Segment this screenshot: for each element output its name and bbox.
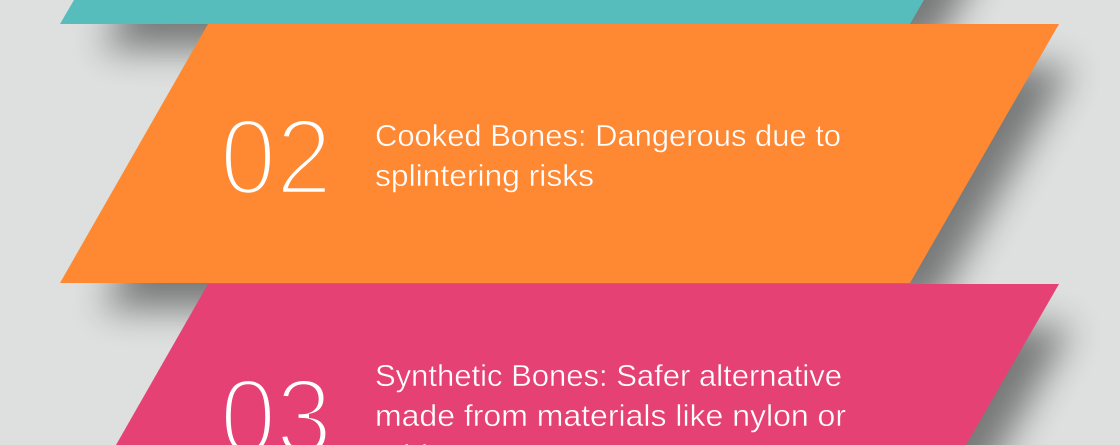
text: synthetic bones xyxy=(375,358,846,445)
panel: pink band 03 xyxy=(101,284,1072,445)
panel: teal band 01 xyxy=(60,0,1072,49)
panel: orange band 02 xyxy=(60,24,1072,309)
text: cooked bones xyxy=(375,118,841,193)
text: synthetic bones: made from materials like nylon or xyxy=(375,398,846,433)
text: synthetic bones: Synthetic Bones: Safer alternative xyxy=(375,358,842,393)
number 02: 02 xyxy=(220,96,332,217)
text: cooked bones: splintering risks xyxy=(375,158,594,193)
text: cooked bones: Cooked Bones: Dangerous due to xyxy=(375,118,841,153)
